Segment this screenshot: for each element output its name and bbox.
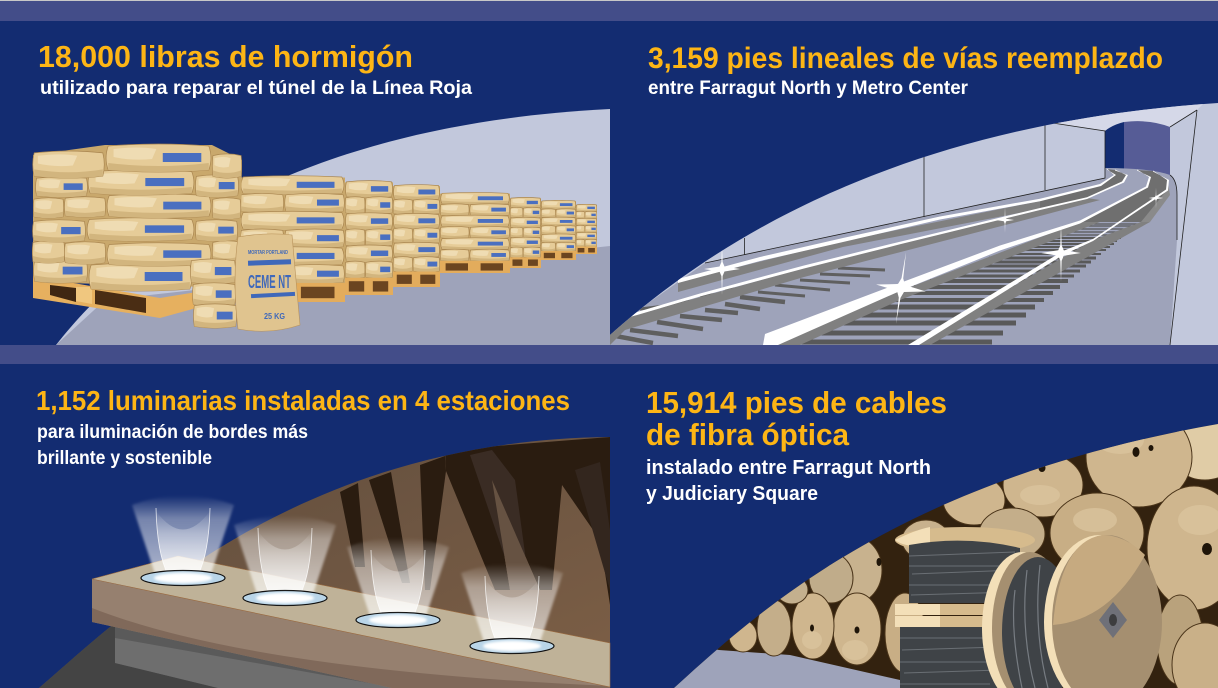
middle band — [0, 345, 1218, 365]
sleepers: right track — [771, 224, 1138, 342]
sleepers: left track — [610, 268, 885, 343]
text: concrete detail: utilizado para reparar el túnel de la Línea Roja — [40, 77, 472, 99]
panel: concrete — [32, 100, 610, 345]
text: lights detail: para iluminación de bordes más — [37, 422, 308, 443]
heading: lights: 1,152 luminarias instaladas en 4 estaciones — [36, 385, 570, 416]
rear cement pallets — [240, 176, 597, 302]
top band — [0, 0, 1218, 21]
big cement bag: MORTAR PORTLAND — [248, 250, 288, 256]
station wall — [39, 437, 610, 688]
small bags — [190, 259, 237, 328]
big cement bag: CEME NT — [248, 272, 291, 292]
text: cables detail: y Judiciary Square — [646, 483, 818, 505]
big cement bag — [235, 234, 300, 331]
heading: cables: 15,914 pies de cables — [646, 385, 947, 420]
tunnel wall — [610, 100, 1218, 345]
text: rails detail: entre Farragut North y Metro Center — [648, 77, 968, 99]
text: cables detail — [646, 457, 931, 505]
front cement pallet — [32, 144, 242, 318]
wood texture — [802, 426, 1218, 660]
ceiling — [1056, 104, 1203, 130]
drum holes — [810, 445, 1212, 634]
heading: rails: 3,159 pies lineales de vías reemplazdo — [648, 42, 1163, 75]
platform side — [92, 579, 610, 688]
heading: concrete: 18,000 libras de hormigón — [38, 40, 413, 74]
text: lights detail: brillante y sostenible — [37, 448, 212, 469]
panel: lights — [39, 437, 610, 688]
heading: cables: de fibra óptica — [646, 417, 850, 452]
panel: cables — [670, 407, 1218, 688]
text: lights detail — [37, 422, 308, 469]
heading: cables — [646, 385, 947, 452]
dark backing — [670, 420, 1218, 688]
panel: rails — [610, 100, 1218, 345]
wall joints — [705, 110, 1197, 345]
platform top — [92, 556, 610, 687]
wooden drums — [729, 407, 1218, 688]
light fixtures — [132, 496, 563, 654]
floor — [674, 650, 900, 688]
rear cable spool — [895, 527, 1035, 688]
track floor — [610, 168, 1177, 345]
tunnel opening — [1105, 121, 1170, 178]
ground and lower wall — [40, 626, 391, 688]
sparkles — [704, 188, 1163, 328]
front cable spool — [982, 535, 1162, 688]
tunnel wall and floor — [50, 100, 610, 345]
big cement bag: 25 KG — [264, 312, 285, 321]
rail beds — [610, 169, 1170, 345]
white rails — [625, 168, 1169, 345]
text: cables detail: instalado entre Farragut North — [646, 457, 931, 479]
